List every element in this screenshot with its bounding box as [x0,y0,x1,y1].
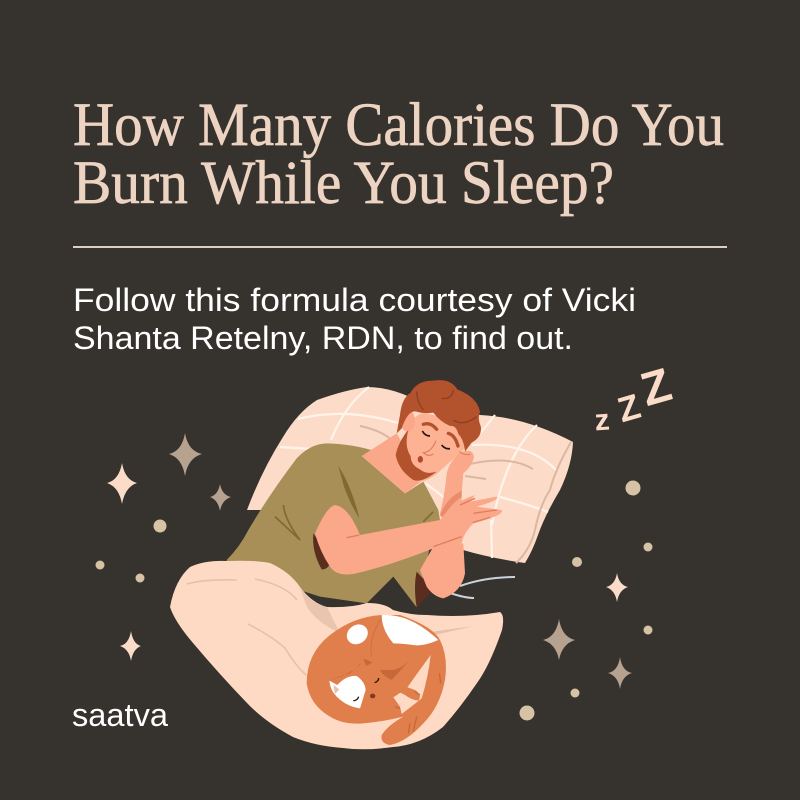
title [73,92,724,217]
icon: sleeping zzz [593,357,677,437]
subtitle text [73,282,636,356]
shirt [227,443,440,607]
decorative dots [96,480,652,720]
ear [400,410,415,432]
cat white patches [382,615,438,645]
facial features [418,424,458,463]
blanket [170,561,503,749]
gap between legs and tail [393,655,431,714]
cat head [328,653,381,708]
illustration: sleeping man and cat [170,380,573,749]
main arm and hand [315,495,502,575]
saatva logo: saatva [72,697,168,733]
shirt shading [338,466,359,518]
icon: sleeping zzz: Z [613,387,645,430]
cat [307,615,446,745]
hair curls [417,390,477,423]
pillow [247,387,573,563]
subtitle text: Follow this formula courtesy of Vicki [73,282,636,318]
lower arm [420,543,465,598]
title: How Many Calories Do You [73,92,724,159]
bed sheet wrinkles [450,577,515,598]
icon: sleeping zzz: Z [635,357,677,416]
cat claw and tail marks [395,673,441,733]
icon: sparkle stars [107,433,632,689]
cat body and tail [307,615,446,745]
cat paws [388,682,420,701]
title: Burn While You Sleep? [73,150,614,217]
neck [362,433,423,493]
face [397,413,465,482]
subtitle text: Shanta Retelny, RDN, to find out. [73,320,573,356]
beard [396,430,437,481]
icon: sleeping zzz: z [593,404,611,437]
supporting forearm and hand [440,451,474,518]
man [227,380,502,607]
cat folds [371,620,380,657]
hair [397,380,481,452]
